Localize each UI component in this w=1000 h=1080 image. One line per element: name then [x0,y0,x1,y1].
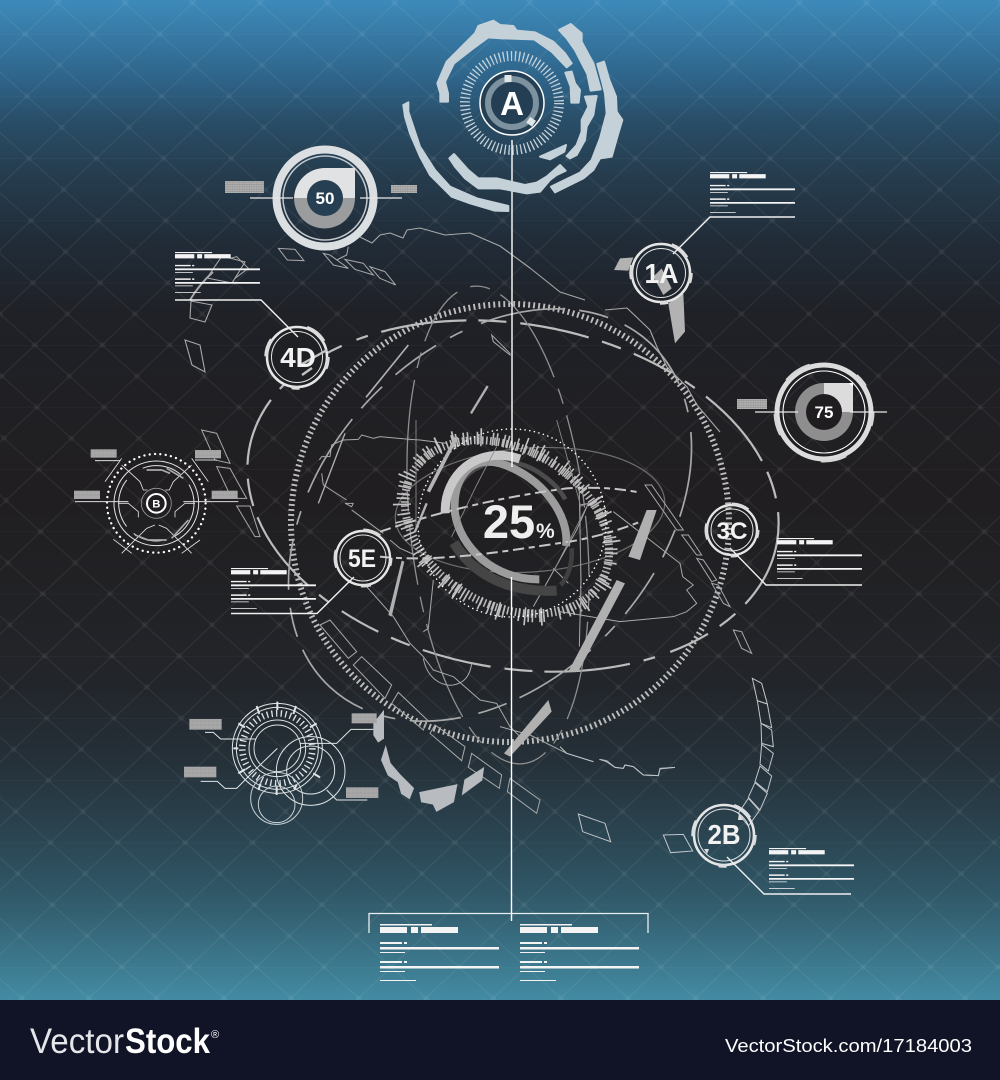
central gauge: % [536,520,555,543]
gauge arcs [380,420,640,617]
text block 3C with connector [730,538,862,585]
donut [294,168,355,198]
registered mark: ® [211,1029,219,1041]
big globe wireframe [208,229,807,801]
badge 4D: 4D [280,342,316,373]
label: 1A [644,258,678,289]
map outline lines [319,228,720,776]
small label blocks [225,181,264,193]
badge 3C [706,504,758,556]
parallelogram arc: lower right towards 2B [560,678,773,853]
parallelogram chain: left of globe [202,430,260,537]
broken outer arcs [403,21,622,211]
label blocks [189,719,222,730]
logo wordmark: Vector: Vector [30,1022,124,1061]
chevron shards [614,257,685,343]
irregular outer ring [276,150,374,246]
badge 2B [693,804,755,866]
text block right [520,924,639,981]
tick ring [465,56,559,150]
irregular outer ring [777,365,871,459]
dashed orbit: tall meridian ellipse [385,277,611,773]
donut [795,383,853,441]
value: 50 [316,189,334,208]
text block 1A with connector [673,172,795,254]
overlapping circles diagram [184,702,378,824]
overlapping rings [276,737,345,805]
ring markers [233,702,320,795]
inner connectors [105,458,208,553]
value: 75 [815,403,833,422]
axis lines [755,411,887,413]
dotted ring [107,454,206,553]
dashed orbit: diagonal ellipse [208,229,772,801]
label blocks [91,449,117,458]
badge 5E [335,530,391,586]
badge 1A [614,243,691,343]
badge A with broken rings [403,21,622,211]
thin orbit ellipse around the centre [391,439,669,581]
radar B [74,449,238,553]
gauge value 25%: 25 [483,495,535,548]
badge 5E: 5E [348,545,376,573]
grey shards crossing the globe [318,345,657,757]
logo wordmark: Stock: Stock [125,1022,210,1061]
text block left [380,924,499,981]
text block 2B with connector [727,848,854,894]
dotted ring [418,429,606,617]
text block 4D with connector [175,252,298,337]
axis lines [250,197,402,199]
concentric rings [114,461,199,546]
central gauge [370,401,644,653]
tick ring: outer globe [291,304,729,742]
badge 4D [266,326,328,388]
concentric rings [232,703,322,793]
footer bar [0,1000,1000,1080]
badge 3C: 3C [716,518,748,545]
bottom bracket with two text blocks [369,914,648,981]
small label block [737,399,767,409]
image id: VectorStock.com/17184003 [725,1036,972,1056]
letter A: A [500,85,524,122]
parallelogram chain: upper left [185,247,510,372]
bracket [369,914,648,933]
donut gauge 50 [225,147,417,249]
dashed orbit: wide tilted ellipse [219,280,807,712]
inner ring [480,71,544,135]
parallelogram chain and shards: bottom of globe [320,620,540,813]
badge 2B: 2B [708,819,740,850]
central vertical line [510,140,513,921]
letter B: B [152,498,160,510]
donut gauge 75 [737,363,887,461]
connectors with nodes [201,729,373,800]
spiky tick ring [370,401,644,653]
text block 5E with connector [231,568,354,614]
rings [632,244,690,302]
parallelogram chain: right of globe [645,485,752,653]
